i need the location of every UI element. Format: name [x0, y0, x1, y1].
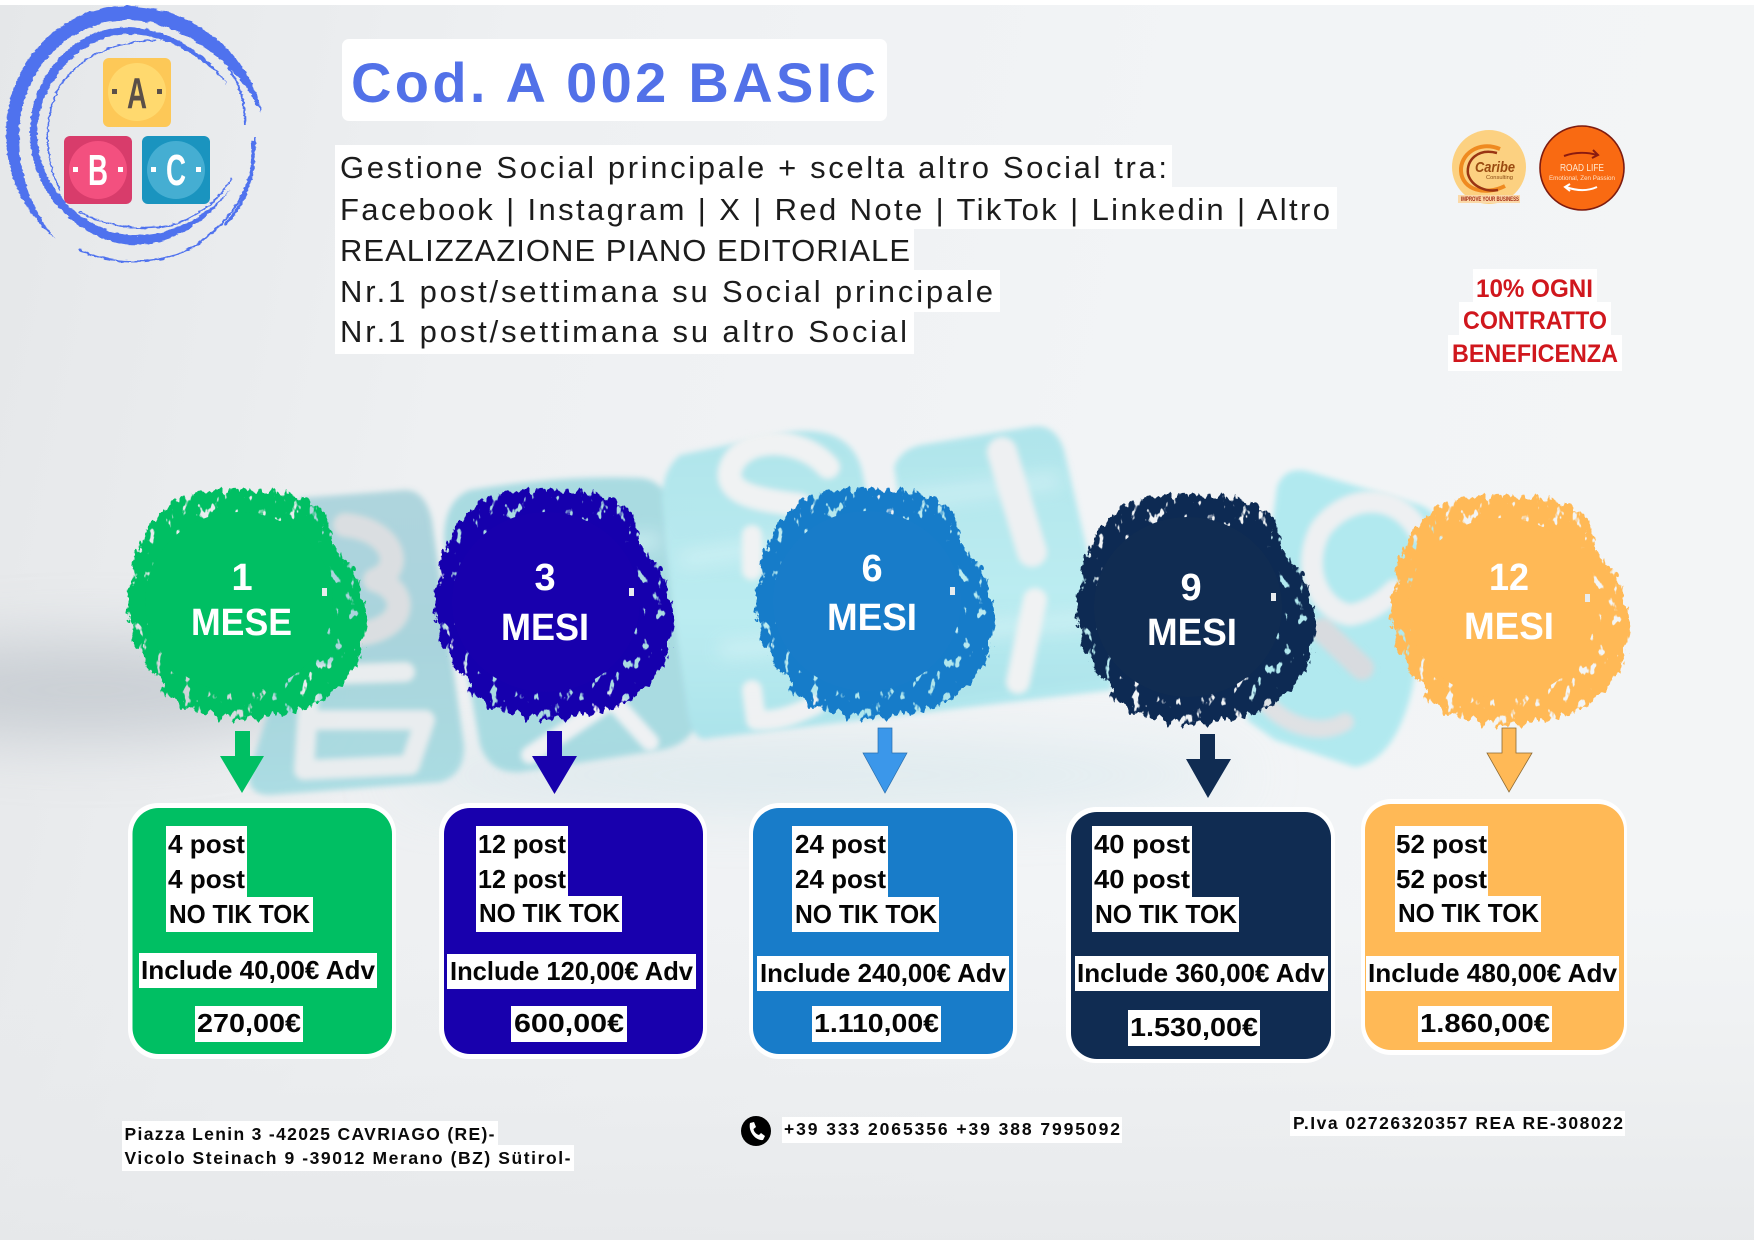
letter block B — [64, 136, 132, 204]
price card: 3 mesi — [439, 803, 707, 1059]
charity callout: BENEFICENZA — [1452, 340, 1618, 368]
charity callout: CONTRATTO — [1463, 307, 1607, 335]
duration blob: 6 mesi: MESI — [827, 597, 917, 639]
price card: 6 mesi: 24 post — [795, 864, 886, 894]
partner logo: Caribe Consulting: IMPROVE YOUR BUSINESS — [1461, 196, 1519, 203]
duration blob: 12 mesi — [1392, 496, 1628, 725]
arrow: green — [220, 731, 264, 793]
price card: 9 mesi: 40 post — [1094, 829, 1190, 859]
partner logo: Road Life: Emotional, Zen Passion — [1549, 175, 1615, 182]
price card: 1 mese: 4 post — [168, 864, 245, 894]
price card: 1 mese: 270,00€ — [197, 1008, 301, 1038]
description text block: REALIZZAZIONE PIANO EDITORIALE — [340, 233, 910, 268]
price card: 3 mesi: Include 120,00€ Adv — [450, 956, 694, 986]
arrow: navy — [1186, 734, 1231, 798]
price card: 9 mesi: Include 360,00€ Adv — [1077, 958, 1326, 988]
price card: 3 mesi: 600,00€ — [514, 1008, 624, 1038]
price card: 3 mesi: 12 post — [478, 829, 566, 859]
description text block: Nr.1 post/settimana su altro Social — [340, 314, 907, 349]
partner logo: Caribe Consulting: Caribe — [1475, 159, 1515, 176]
footer: addresses: Piazza Lenin 3 -42025 CAVRIAGO (RE)- — [124, 1124, 495, 1144]
duration blob: 1 mese: MESE — [191, 602, 292, 644]
duration blob: 3 mesi: MESI — [501, 607, 589, 649]
description text block: Facebook | Instagram | X | Red Note | TikTok | Linkedin | Altro — [340, 192, 1330, 227]
partner logo: Road Life: ROAD LIFE — [1560, 163, 1604, 174]
footer: phone numbers: +39 333 2065356 +39 388 7995092 — [784, 1119, 1120, 1139]
duration blob: 9 mesi: 9 — [1180, 567, 1202, 609]
arrow: blue — [863, 728, 907, 793]
footer: addresses: Vicolo Steinach 9 -39012 Merano (BZ) Sütirol- — [124, 1148, 571, 1168]
arrow: indigo — [532, 731, 577, 794]
letter block C — [142, 136, 210, 204]
charity callout — [1448, 269, 1622, 371]
letter block C: C — [166, 146, 186, 195]
icon: phone — [741, 1116, 771, 1146]
duration blob: 1 mese: 1 — [231, 557, 253, 599]
price card: 1 mese: NO TIK TOK — [169, 899, 310, 929]
price card: 9 mesi: 1.530,00€ — [1130, 1012, 1258, 1042]
price card: 1 mese: Include 40,00€ Adv — [141, 955, 376, 985]
price card: 12 mesi: NO TIK TOK — [1398, 898, 1539, 928]
title: Cod. A 002 BASIC — [351, 51, 876, 114]
price card: 12 mesi — [1361, 799, 1627, 1055]
duration blob: 12 mesi: 12 — [1489, 557, 1529, 599]
partner logo: Road Life — [1540, 126, 1624, 210]
description text block: Nr.1 post/settimana su Social principale — [340, 274, 993, 309]
letter block A: A — [127, 69, 147, 118]
duration blob: 12 mesi: MESI — [1464, 606, 1554, 648]
price card: 12 mesi: Include 480,00€ Adv — [1368, 958, 1618, 988]
duration blob: 9 mesi — [1078, 495, 1314, 724]
letter block A — [103, 58, 171, 127]
price card: 9 mesi: 40 post — [1094, 864, 1190, 894]
partner logo: Caribe Consulting: Consulting — [1486, 175, 1513, 181]
description text block: Gestione Social principale + scelta altro Social tra: — [340, 150, 1167, 185]
price card: 6 mesi: NO TIK TOK — [795, 899, 937, 929]
footer: addresses — [122, 1121, 574, 1171]
arrow: orange — [1487, 728, 1532, 792]
brush ring — [6, 6, 261, 262]
price card: 1 mese — [128, 803, 396, 1059]
background photo: letter cubes — [249, 426, 1441, 795]
price card: 6 mesi — [749, 803, 1017, 1059]
description text block — [335, 145, 1337, 354]
letter block B: B — [88, 146, 108, 195]
price card: 6 mesi: Include 240,00€ Adv — [760, 958, 1007, 988]
price card: 9 mesi: NO TIK TOK — [1095, 899, 1237, 929]
price card: 1 mese: 4 post — [168, 829, 245, 859]
price card: 6 mesi: 24 post — [795, 829, 886, 859]
price card: 3 mesi: NO TIK TOK — [479, 898, 620, 928]
price card: 6 mesi: 1.110,00€ — [814, 1008, 939, 1038]
price card: 12 mesi: 52 post — [1396, 829, 1487, 859]
duration blob: 6 mesi — [757, 489, 993, 718]
duration blob: 9 mesi: MESI — [1147, 612, 1237, 654]
partner logo: Caribe Consulting — [1452, 130, 1526, 204]
footer: VAT number: P.Iva 02726320357 REA RE-308022 — [1293, 1113, 1623, 1133]
price card: 12 mesi: 52 post — [1396, 864, 1487, 894]
duration blob: 1 mese — [129, 490, 365, 719]
price card: 12 mesi: 1.860,00€ — [1420, 1008, 1550, 1038]
price card: 3 mesi: 12 post — [478, 864, 566, 894]
duration blob: 3 mesi — [436, 490, 672, 719]
duration blob: 3 mesi: 3 — [534, 557, 556, 599]
price card: 9 mesi — [1066, 807, 1335, 1063]
charity callout: 10% OGNI — [1476, 275, 1593, 303]
duration blob: 6 mesi: 6 — [861, 548, 883, 590]
logo: ABC circle — [6, 6, 261, 262]
